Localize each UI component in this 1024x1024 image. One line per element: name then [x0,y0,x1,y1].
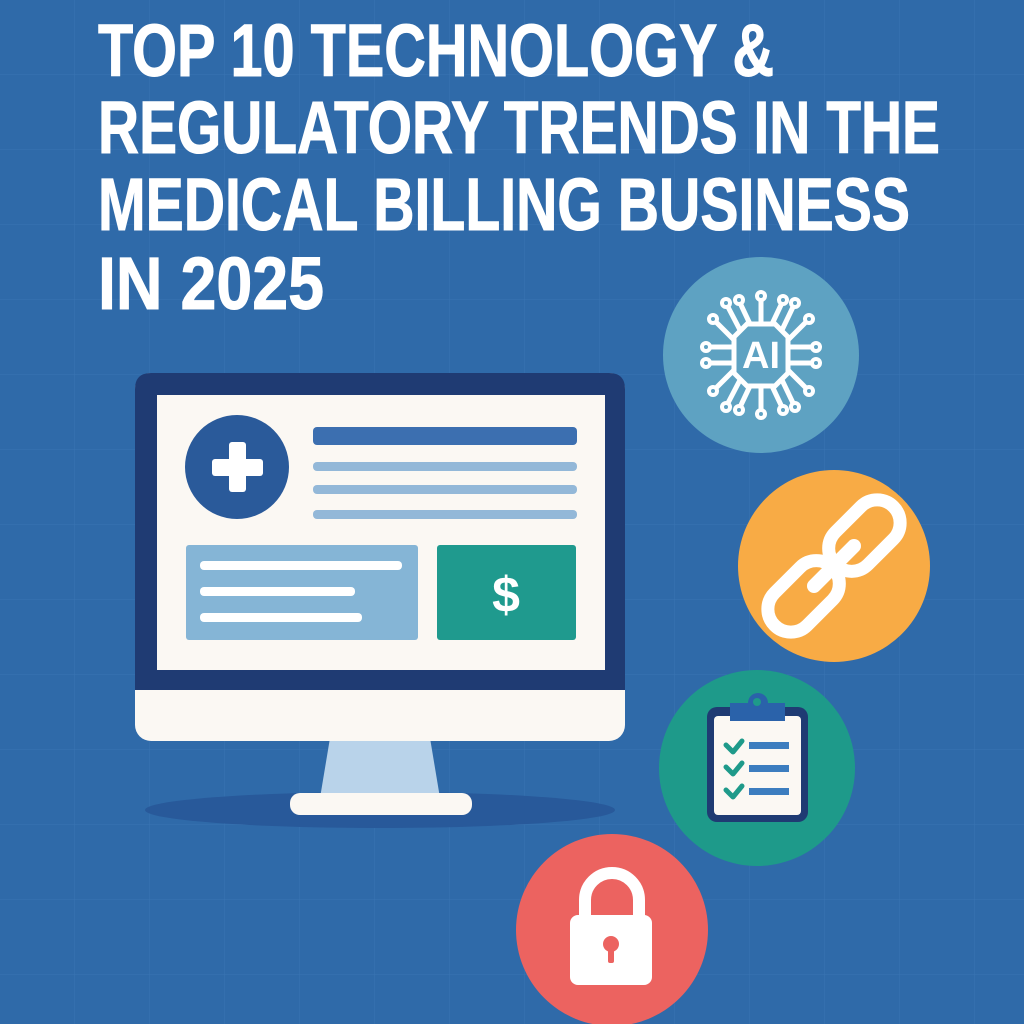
monitor [135,373,625,828]
title: IN 2025 [98,242,324,325]
text lines [313,427,577,519]
title: TOP 10 TECHNOLOGY & [98,9,774,92]
icon: AI chip: AI [742,335,780,377]
title [98,9,940,325]
icon: medical cross [185,415,289,519]
icon: clipboard checklist [659,670,855,866]
icon: padlock [516,834,708,1024]
icon: AI chip [663,257,859,453]
screen [157,395,605,670]
icon: chain link [738,470,930,662]
payment panel: $ [492,567,520,623]
info panel [186,545,418,640]
payment panel [437,545,576,640]
